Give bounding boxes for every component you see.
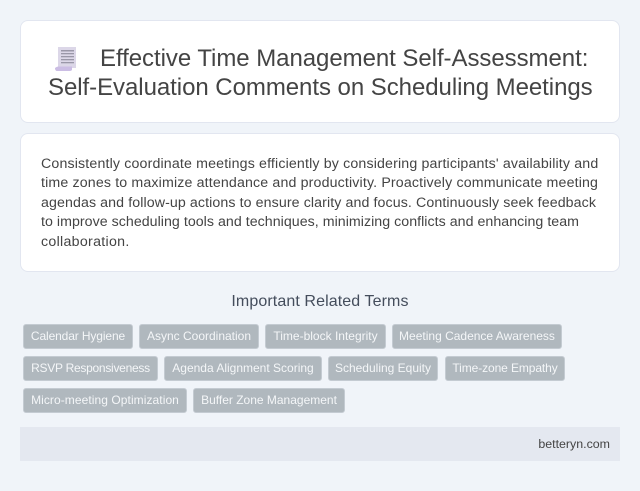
tag: Meeting Cadence Awareness	[399, 329, 555, 343]
tag	[23, 324, 133, 349]
tag	[265, 324, 386, 349]
title: Self-Evaluation Comments on Scheduling Meetings	[48, 74, 593, 101]
panel: description card	[20, 133, 620, 272]
tag	[23, 356, 158, 381]
tag: Time-zone Empathy	[452, 361, 558, 375]
heading: related terms: Important Related Terms	[231, 293, 409, 310]
tag: Buffer Zone Management	[201, 393, 337, 407]
icon: scroll document	[55, 47, 76, 71]
tag: Async Coordination	[147, 329, 251, 343]
description text: Consistently coordinate meetings efficiently by considering participants' availability and	[41, 156, 598, 172]
footer brand: betteryn.com	[538, 437, 610, 451]
tag: Scheduling Equity	[335, 361, 431, 375]
tag: RSVP Responsiveness	[31, 361, 150, 375]
tag	[193, 388, 345, 413]
title: Effective Time Management Self-Assessment:	[100, 45, 588, 72]
footer bar	[20, 427, 620, 461]
tag	[139, 324, 259, 349]
title	[48, 45, 593, 101]
description text	[41, 156, 598, 250]
tag: Agenda Alignment Scoring	[172, 361, 314, 375]
tag	[164, 356, 322, 381]
tag	[392, 324, 562, 349]
panel: title card	[20, 20, 620, 123]
tag	[445, 356, 565, 381]
tag: Calendar Hygiene	[31, 329, 125, 343]
description text: time zones to maximize attendance and productivity. Proactively communicate meeting	[41, 175, 598, 191]
tag list	[23, 324, 565, 413]
tag: Micro-meeting Optimization	[31, 393, 179, 407]
tag	[23, 388, 187, 413]
tag	[328, 356, 438, 381]
description text: agendas and follow-up actions to ensure clarity and focus. Continuously seek feedback	[41, 195, 596, 211]
description text: to improve scheduling tools and techniques, minimizing conflicts and enhancing team	[41, 214, 579, 230]
description text: collaboration.	[41, 234, 130, 250]
tag: Time-block Integrity	[273, 329, 378, 343]
